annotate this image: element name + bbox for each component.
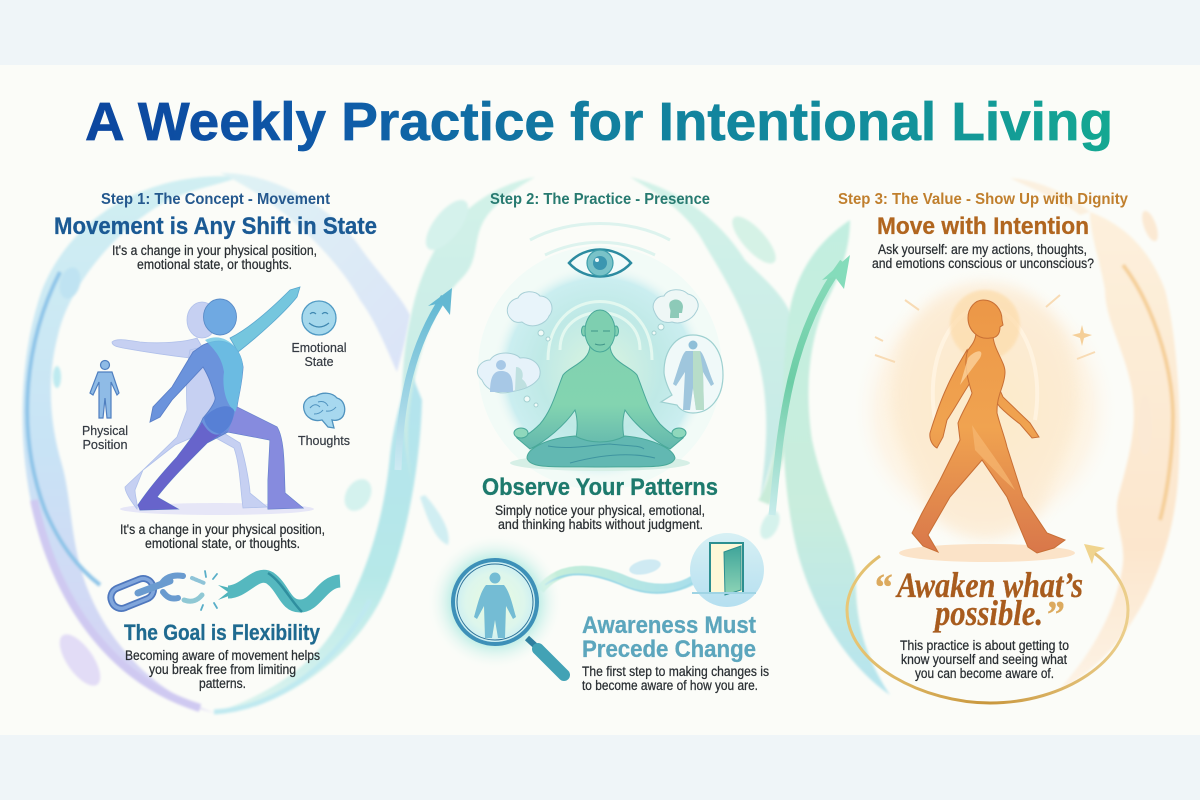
heading: movement is any shift in state: Movement is Any Shift in State (54, 213, 377, 240)
text: awareness body: to become aware of how you are. (582, 678, 758, 693)
icon: magnifying glass (427, 534, 564, 675)
text: observe body (495, 503, 705, 532)
text: observe body: and thinking habits without judgment. (498, 517, 703, 532)
label: physical position: Position (82, 437, 128, 452)
swirl frame: step 3 (783, 178, 1179, 695)
icon: brain (304, 393, 345, 428)
text: repeated definition (120, 522, 325, 551)
swirl frame: step 2 (402, 177, 805, 545)
ring: gold arrow loop around quote (847, 544, 1128, 703)
heading: observe your patterns: Observe Your Patterns (482, 474, 718, 501)
icon: physical position person (90, 360, 119, 418)
text: closing body: This practice is about getting to (900, 638, 1069, 653)
icon: flowing ribbon (218, 573, 340, 612)
connector: wave from magnifier to door (540, 557, 722, 593)
label: emotional state: Emotional (292, 340, 347, 355)
text: definition (112, 243, 317, 272)
label: thoughts: Thoughts (298, 433, 350, 448)
text: repeated definition: emotional state, or thoughts. (145, 536, 300, 551)
panel: step 1 movement (22, 173, 422, 713)
label: emotional state (292, 340, 347, 369)
quote: awaken what's possible: possible. (932, 593, 1043, 633)
figure: meditating person (510, 310, 690, 471)
text: repeated definition: It's a change in your physical position, (120, 522, 325, 537)
text: flexibility body (125, 648, 320, 691)
text: awareness body (582, 664, 769, 693)
text: flexibility body: patterns. (199, 676, 246, 691)
text: ask yourself: and emotions conscious or unconscious? (872, 256, 1094, 271)
arrow: step 1 to step 2 (398, 288, 452, 470)
heading: step 1 label: Step 1: The Concept - Movement (101, 191, 330, 208)
heading: the goal is flexibility: The Goal is Flexibility (124, 620, 321, 645)
text: definition: It's a change in your physical position, (112, 243, 317, 258)
halo: walking figure glow (850, 275, 1120, 545)
swirl frame: step 1 (22, 173, 422, 713)
icon: eye (569, 250, 631, 276)
heading: awareness must precede change: Awareness Must (582, 612, 756, 639)
text: flexibility body: Becoming aware of movement helps (125, 648, 320, 663)
halo: meditation glow (478, 224, 722, 490)
heading: step 3 label: Step 3: The Value - Show Up with Dignity (838, 191, 1128, 208)
heading: move with intention: Move with Intention (877, 213, 1089, 240)
text: flexibility body: you break free from limiting (149, 662, 296, 677)
label: emotional state: State (304, 354, 334, 369)
quote: awaken what's possible: ” (1045, 594, 1064, 636)
icon: broken chain (108, 571, 217, 611)
text: closing body: know yourself and seeing what (901, 652, 1067, 667)
icon: smiling face (302, 301, 336, 335)
icon: thought cloud top-left (507, 292, 552, 341)
figure: walking person (899, 300, 1075, 562)
title: A Weekly Practice for Intentional Living (85, 92, 1113, 152)
label: physical position: Physical (82, 423, 128, 438)
heading: awareness must precede change: Precede Change (582, 636, 756, 663)
icon: body awareness bubble (661, 335, 723, 413)
figure: moving person with ghost (112, 287, 314, 515)
text: closing body (900, 638, 1069, 681)
text: definition: emotional state, or thoughts. (137, 257, 292, 272)
text: ask yourself (872, 242, 1094, 271)
quote: awaken what's possible: “ (873, 567, 892, 609)
quote: awaken what's possible: Awaken what’s (895, 565, 1083, 605)
panel: step 3 dignity (772, 178, 1179, 703)
label: physical position (82, 423, 128, 452)
text: closing body: you can become aware of. (915, 666, 1054, 681)
panel: step 2 presence (398, 177, 805, 693)
icon: thought cloud with head (652, 290, 698, 335)
heading: step 2 label: Step 2: The Practice - Presence (490, 191, 710, 208)
heading: awareness must precede change (582, 612, 756, 663)
text: awareness body: The first step to making changes is (582, 664, 769, 679)
arrow: step 2 to step 3 (772, 255, 850, 515)
quote: awaken what's possible (873, 565, 1083, 636)
icon: thought cloud with people (477, 353, 540, 407)
text: observe body: Simply notice your physical, emotional, (495, 503, 705, 518)
text: ask yourself: Ask yourself: are my actions, thoughts, (878, 242, 1087, 257)
icon: open door (690, 533, 764, 607)
